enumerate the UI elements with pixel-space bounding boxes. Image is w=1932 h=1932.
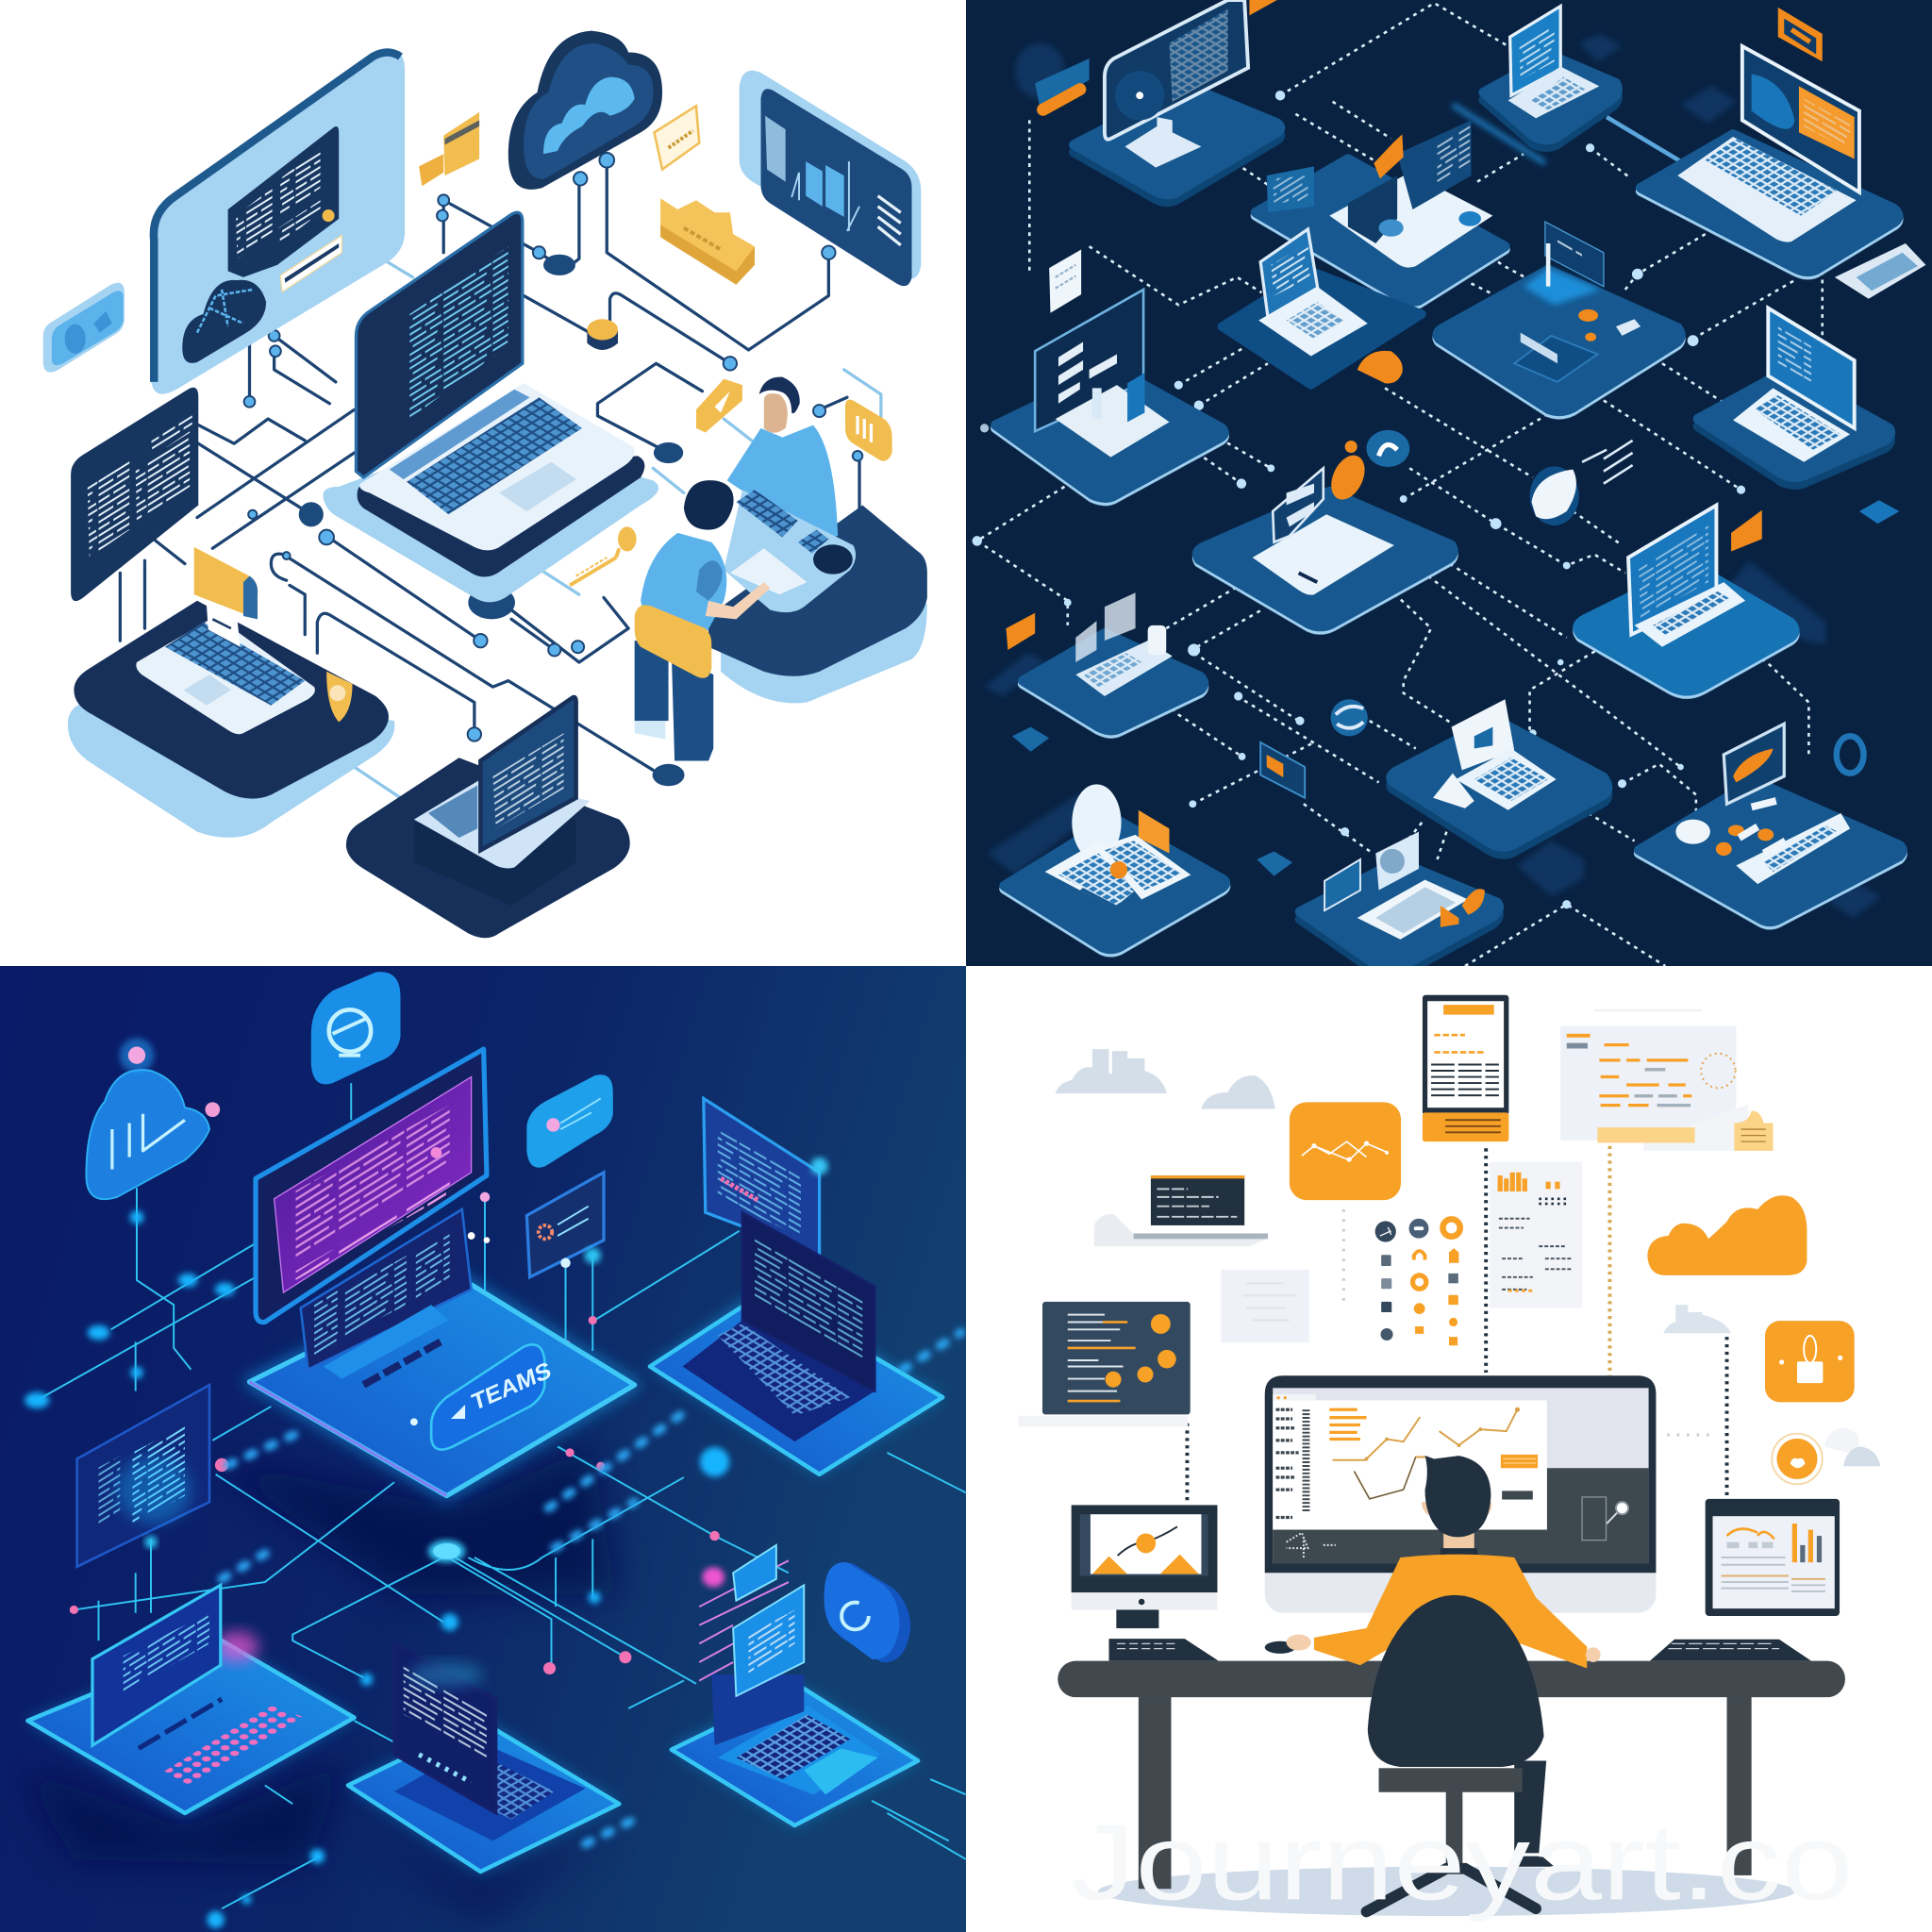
yellow chair back	[635, 605, 711, 678]
orange lock card	[1765, 1321, 1855, 1402]
icon: big cloud	[508, 31, 662, 190]
right keyboard	[1650, 1640, 1811, 1661]
platform 11: left lower workstation	[1006, 592, 1204, 752]
dashed connectors	[977, 3, 1823, 966]
back person	[727, 377, 838, 542]
floor shadow	[1098, 1867, 1795, 1916]
code widget with nodes	[1019, 1302, 1191, 1426]
head	[1443, 1517, 1474, 1551]
small cloud	[182, 280, 266, 363]
developer figure	[1287, 1456, 1601, 1911]
platform 8: right laptop	[1698, 308, 1890, 477]
seat	[1379, 1768, 1523, 1792]
panel: top-left white isometric network	[0, 0, 966, 966]
icon: left pill badge	[43, 283, 125, 373]
platform 2: top laptop	[1453, 7, 1681, 163]
blank note sheet	[1221, 1270, 1309, 1342]
main laptop	[323, 212, 658, 602]
panel: right dashboard	[740, 71, 921, 286]
icon: blue card top right	[1835, 243, 1925, 299]
mouse	[1265, 1641, 1295, 1654]
trackpad	[499, 462, 576, 511]
bar chart sheet	[1490, 1162, 1582, 1307]
glowing nodes	[25, 1210, 729, 1928]
watermark text: Journeyart.co	[1071, 1803, 1853, 1923]
icon: pill bubble	[526, 1074, 613, 1168]
main monitor	[256, 1049, 487, 1323]
icon: small orange screen	[1260, 742, 1305, 798]
panel: top-right dark network	[966, 0, 1932, 966]
white bar	[280, 235, 341, 292]
right tablet chart	[1706, 1499, 1840, 1616]
main monitor	[1265, 1375, 1656, 1613]
left small monitor	[1072, 1505, 1217, 1628]
panel: left code monitor	[71, 388, 198, 601]
gray clouds	[1056, 1049, 1731, 1333]
platform 5: document laptop	[1222, 229, 1422, 385]
orange chart card	[1290, 1102, 1401, 1200]
panel: right laptop platform	[650, 1098, 942, 1474]
platform 10: right center laptop	[1577, 500, 1899, 691]
panel: bottom monitor platform	[346, 697, 630, 938]
icon: orange blob	[1357, 351, 1403, 383]
orange cloud	[1647, 1195, 1807, 1275]
dark connector hubs	[299, 255, 685, 786]
icon: yellow cylinder	[587, 319, 618, 350]
soft background tiles	[985, 34, 1881, 918]
connector lines	[120, 160, 881, 798]
platform 12: bottom center laptop	[1391, 699, 1607, 847]
platform 4: white workstation scene	[1256, 120, 1505, 302]
central hub	[428, 1541, 465, 1562]
icon: yellow tag near person	[696, 379, 742, 432]
desk	[1058, 1661, 1845, 1889]
panel: bottom-left neon network	[0, 966, 966, 1932]
folder	[194, 547, 258, 619]
keyboard	[390, 390, 530, 479]
panel: lower right stacked docs laptop	[672, 1545, 918, 1825]
orange round badge	[1772, 1428, 1880, 1484]
platform 15: bottom middle laptop	[1300, 832, 1499, 962]
icon: yellow document	[655, 106, 699, 170]
icon: yellow key note	[570, 526, 637, 585]
desk top with devices	[724, 490, 856, 612]
small gear panel	[468, 1173, 604, 1277]
team tag	[431, 1344, 544, 1450]
chair and torso	[1368, 1595, 1544, 1767]
platform 14: bottom left laptop	[1004, 784, 1292, 949]
panel: lower middle tablet laptop	[348, 1643, 619, 1872]
platform: right desk	[708, 506, 927, 703]
icon: paper sheet	[1049, 249, 1081, 313]
icon grid	[1375, 1219, 1460, 1345]
panel: light blue board with screen	[151, 50, 405, 394]
neon connector lines	[37, 1083, 966, 1908]
main platform	[249, 1049, 635, 1496]
refresh bubble	[825, 1563, 910, 1662]
icon: yellow lock	[845, 400, 892, 461]
lower monitor	[301, 1209, 472, 1370]
panel: lower left laptop	[27, 1585, 355, 1816]
orange shirt	[1314, 1555, 1587, 1668]
icon: white rocket cloud	[1530, 441, 1633, 525]
platform 1: top-left monitor	[1035, 0, 1280, 194]
laptop screen	[356, 212, 523, 477]
laptop widget	[1094, 1175, 1268, 1246]
platform 6: center hologram	[1438, 222, 1681, 411]
pink nodes	[70, 1316, 720, 1674]
platform 9: center keyboard	[1197, 430, 1454, 626]
platform 7: left terminal	[980, 290, 1224, 498]
screen	[228, 126, 339, 277]
panel: bottom-right developer at desk	[966, 966, 1932, 1932]
icon: cloud	[86, 1038, 220, 1199]
shield	[326, 672, 353, 722]
laptop	[136, 616, 315, 734]
tablet document	[1423, 995, 1508, 1141]
panel: lower-left laptop platform	[68, 547, 394, 838]
icon: orange camera badge	[1778, 8, 1823, 61]
connector nodes	[137, 153, 862, 741]
platform 13: bottom right station	[1639, 724, 1903, 922]
main platform: TEAMS	[469, 1357, 554, 1416]
front person	[635, 480, 770, 761]
connector nodes	[973, 91, 1745, 908]
left keyboard	[1109, 1639, 1219, 1661]
panel: left document	[77, 1385, 209, 1567]
glowing dashes	[222, 1333, 961, 1844]
icon: yellow folder	[419, 112, 479, 186]
icon: yellow puzzle	[660, 198, 755, 285]
platform 3: top-right laptop	[1641, 46, 1898, 272]
dotted connectors	[1187, 1148, 1727, 1501]
dashboard sheet	[1560, 1010, 1774, 1151]
icon: blue circle badge	[1331, 699, 1368, 736]
dark platform shadows	[19, 1446, 623, 1915]
icon: lightbulb bubble	[311, 972, 400, 1084]
